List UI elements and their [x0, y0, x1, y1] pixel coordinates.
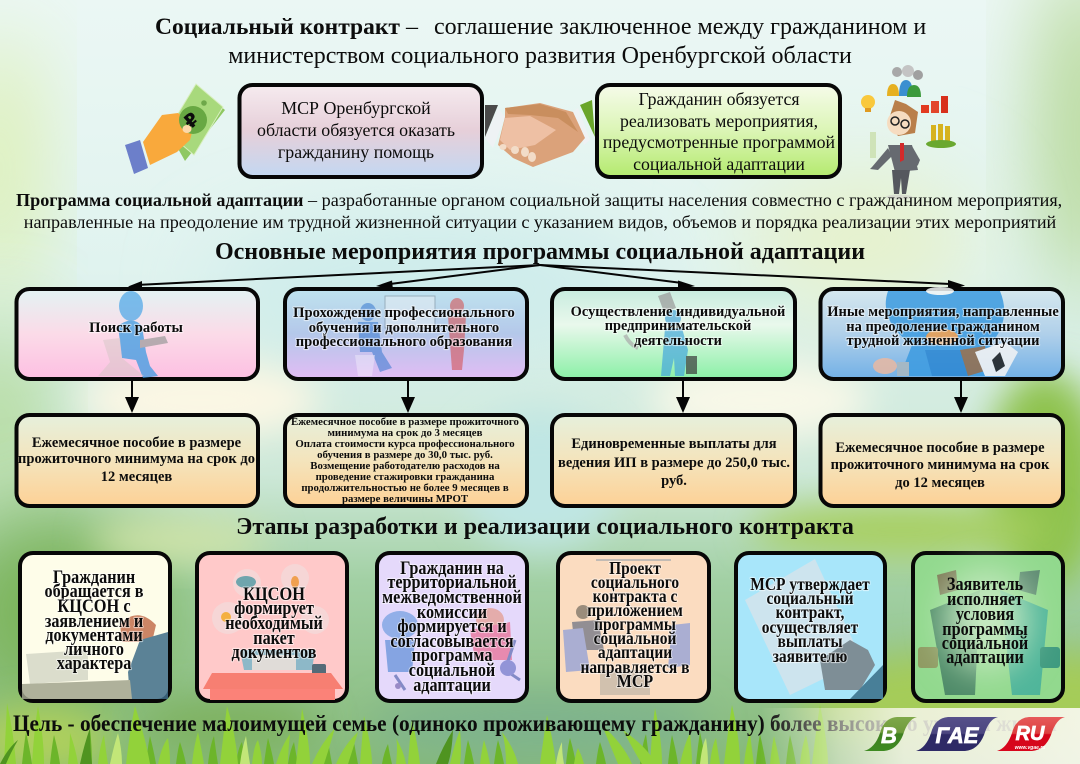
panel: stage 6	[913, 553, 1063, 701]
icon: entrepreneur with briefcase	[625, 292, 697, 376]
text: stage 1: Гражданин	[53, 566, 135, 587]
panel: other support: прожиточного минимума на срок	[831, 457, 1050, 473]
panel: training support: Оплата стоимости курса профессионального	[295, 438, 515, 450]
text: stage 3: согласовывается	[390, 630, 514, 651]
panel: citizen obligation: предусмотренные программой	[603, 132, 836, 152]
text: stage 4: контракта с	[593, 586, 677, 606]
text: stage 4	[580, 558, 690, 691]
panel: entrepreneurship support: Единовременные выплаты для	[571, 436, 777, 452]
panel: stage 4	[558, 553, 709, 701]
heading: stages: Этапы разработки и реализации социального контракта	[236, 514, 854, 540]
icon: hand with money: ₽	[179, 108, 204, 133]
icon: teacher and student	[355, 296, 466, 376]
panel: ministry obligation: области обязуется оказать	[257, 120, 455, 140]
text: stage 2: необходимый	[225, 612, 323, 633]
icon: handshake	[485, 100, 595, 167]
icon: farmer with animals	[873, 287, 1018, 376]
illustration: clerk at desk	[22, 615, 168, 699]
arrows: activities to support	[125, 380, 968, 413]
text: stage 1: документами	[45, 624, 143, 645]
panel: training support: обучения в размере до 30,0 тыс. руб.	[317, 449, 493, 461]
text: social adaptation programme definition: Программа социальной адаптации – разработанные органом социальной защиты населения совместно с гражданином мероприятия,	[16, 190, 1062, 210]
panel: other activities: трудной жизненной ситуации	[847, 333, 1039, 349]
panel: other support: до 12 месяцев	[895, 475, 985, 491]
text: stage 2: КЦСОН	[243, 583, 305, 604]
text: stage 1: обращается в	[44, 580, 144, 601]
panel: citizen obligation: реализовать мероприятия,	[620, 111, 818, 131]
text: stage 1	[44, 566, 144, 673]
illustration: signed document	[745, 559, 883, 699]
panel: citizen obligation: Гражданин обязуется	[638, 89, 800, 109]
text: stage 4: социального	[591, 572, 679, 592]
panel: job search support: 12 месяцев	[101, 469, 172, 485]
text: stage 3: территориальной	[387, 571, 517, 592]
panel: job search: Поиск работы	[89, 320, 183, 336]
arrows: heading to activities	[128, 265, 965, 291]
panel: ministry obligation: гражданину помощь	[278, 142, 434, 162]
text: stage 3: социальной	[409, 659, 495, 680]
panel: entrepreneurship: деятельности	[634, 333, 722, 349]
panel: other support	[820, 415, 1063, 506]
logo: B: В	[881, 723, 897, 748]
panel: training support: Возмещение работодателю расходов на	[310, 460, 500, 472]
panel: other support: Ежемесячное пособие в размере	[835, 440, 1045, 456]
text: stage 2: документов	[232, 641, 316, 662]
text: stage 3: формируется и	[397, 615, 507, 636]
panel: entrepreneurship	[552, 289, 795, 379]
panel: citizen obligation	[597, 85, 840, 177]
illustration: commission meeting	[382, 608, 520, 690]
text: stage 2: формирует	[234, 597, 314, 618]
illustration: document desk	[203, 564, 343, 700]
logo: RU: www.vgae.ru	[1015, 745, 1045, 751]
text: stage 1: личного	[64, 638, 124, 659]
logo: ГАЕ: ГАЕ	[936, 723, 980, 748]
illustration: two businessmen	[918, 570, 1060, 695]
panel: stage 3	[377, 553, 527, 701]
text: social adaptation programme definition: направленные на преодоление им трудной жизненной ситуации с указанием видов, объемов и порядка реализации этих мероприятий	[24, 212, 1057, 232]
text: stage 6: программы	[942, 618, 1028, 639]
text: stage 5: заявителю	[773, 646, 848, 666]
logo: ГАЕ	[916, 717, 998, 751]
panel: stage 5	[736, 553, 885, 701]
panel: citizen obligation: социальной адаптации	[633, 154, 805, 174]
text: stage 6: условия	[956, 603, 1014, 624]
panel: entrepreneurship: предпринимательской	[605, 318, 751, 334]
text: stage 3: Гражданин на	[400, 557, 504, 578]
text: stage 4: приложением	[587, 600, 683, 620]
icon: businessman with ideas	[861, 65, 956, 200]
panel: stage 1	[20, 553, 170, 701]
text: stage 4: социальной	[594, 628, 677, 648]
watermark fade	[760, 708, 1080, 764]
text: stage 3: адаптации	[413, 674, 491, 695]
panel: job search support	[16, 415, 258, 506]
text: stage 5: МСР утверждает	[750, 574, 870, 594]
panel: entrepreneurship support: ведения ИП в размере до 250,0 тыс.	[558, 455, 790, 471]
text: stage 6: адаптации	[946, 646, 1024, 667]
text: stage 4: адаптации	[598, 642, 673, 662]
title: –	[405, 14, 419, 40]
logo	[864, 717, 1065, 751]
text: stage 5: контракт,	[776, 602, 844, 622]
panel: training support: Ежемесячное пособие в размере прожиточного	[291, 416, 519, 428]
text: stage 1: КЦСОН с	[57, 595, 131, 616]
text: stage 1: характера	[57, 652, 132, 673]
title	[155, 14, 926, 69]
text: stage 2: пакет	[253, 627, 295, 648]
panel: job search	[16, 289, 258, 379]
panel: training support: проведение стажировки гражданина	[316, 471, 495, 483]
panel: training support: продолжительностью не более 9 месяцев в	[301, 482, 509, 494]
logo: RU	[997, 717, 1065, 751]
text: social adaptation programme definition	[16, 190, 1062, 232]
illustration: meeting chairs	[563, 559, 690, 695]
panel: other activities: Иные мероприятия, направленные	[827, 304, 1059, 320]
text: stage 6: Заявитель	[947, 573, 1023, 594]
text: stage 3: программа	[412, 644, 493, 665]
icon: person at laptop	[98, 291, 168, 378]
panel: entrepreneurship: Осуществление индивидуальной	[571, 304, 785, 320]
panel: vocational training: профессионального образования	[296, 334, 512, 350]
text: stage 4: Проект	[609, 558, 661, 578]
text: goal: Цель - обеспечение малоимущей семье (одиноко проживающему гражданину) более высокого уровня жизни	[13, 710, 1057, 736]
panel: vocational training	[285, 289, 527, 379]
text: stage 6: социальной	[942, 632, 1028, 653]
title: министерством социального развития Оренбургской области	[228, 43, 852, 69]
text: stage 2	[225, 583, 323, 662]
panel: entrepreneurship support: руб.	[661, 473, 687, 489]
text: stage 4: направляется в	[580, 657, 690, 677]
panel: ministry obligation: МСР Оренбургской	[281, 98, 431, 118]
panel: stage 2	[197, 553, 347, 701]
text: stage 4: МСР	[617, 671, 654, 691]
text: stage 5: выплаты	[777, 631, 843, 651]
panel: training support	[285, 415, 527, 506]
logo: B	[864, 717, 917, 751]
text: stage 3: комиссии	[417, 601, 487, 622]
panel: job search support: Ежемесячное пособие в размере	[32, 435, 242, 451]
title: Социальный контракт	[155, 14, 400, 40]
logo: RU: RU	[1016, 723, 1045, 745]
text: stage 6	[942, 573, 1028, 667]
text: stage 5: социальный	[766, 588, 854, 608]
panel: job search support: прожиточного минимума на срок до	[18, 451, 255, 467]
grass	[0, 703, 828, 764]
panel: other activities	[820, 287, 1063, 379]
text: stage 3	[382, 557, 522, 695]
panel: ministry obligation	[240, 85, 482, 177]
panel: entrepreneurship support	[552, 415, 795, 506]
text: stage 4: программы	[594, 614, 676, 634]
title: соглашение заключенное между гражданином и	[434, 14, 926, 40]
panel: training support: размере величины МРОТ	[342, 493, 469, 505]
panel: other activities: на преодоление гражданином	[846, 319, 1040, 335]
panel: vocational training: Прохождение профессионального	[293, 305, 515, 321]
text: stage 5: осуществляет	[762, 617, 858, 637]
text: stage 1: заявлением и	[45, 610, 143, 631]
panel: training support: минимума на срок до 3 месяцев	[328, 427, 483, 439]
icon: hand with money	[125, 84, 225, 174]
heading: main activities: Основные мероприятия программы социальной адаптации	[215, 239, 865, 265]
panel: vocational training: обучения и дополнительного	[309, 320, 499, 336]
text: stage 5	[750, 574, 870, 666]
text: stage 6: исполняет	[947, 588, 1023, 609]
text: stage 3: межведомственной	[382, 586, 522, 607]
